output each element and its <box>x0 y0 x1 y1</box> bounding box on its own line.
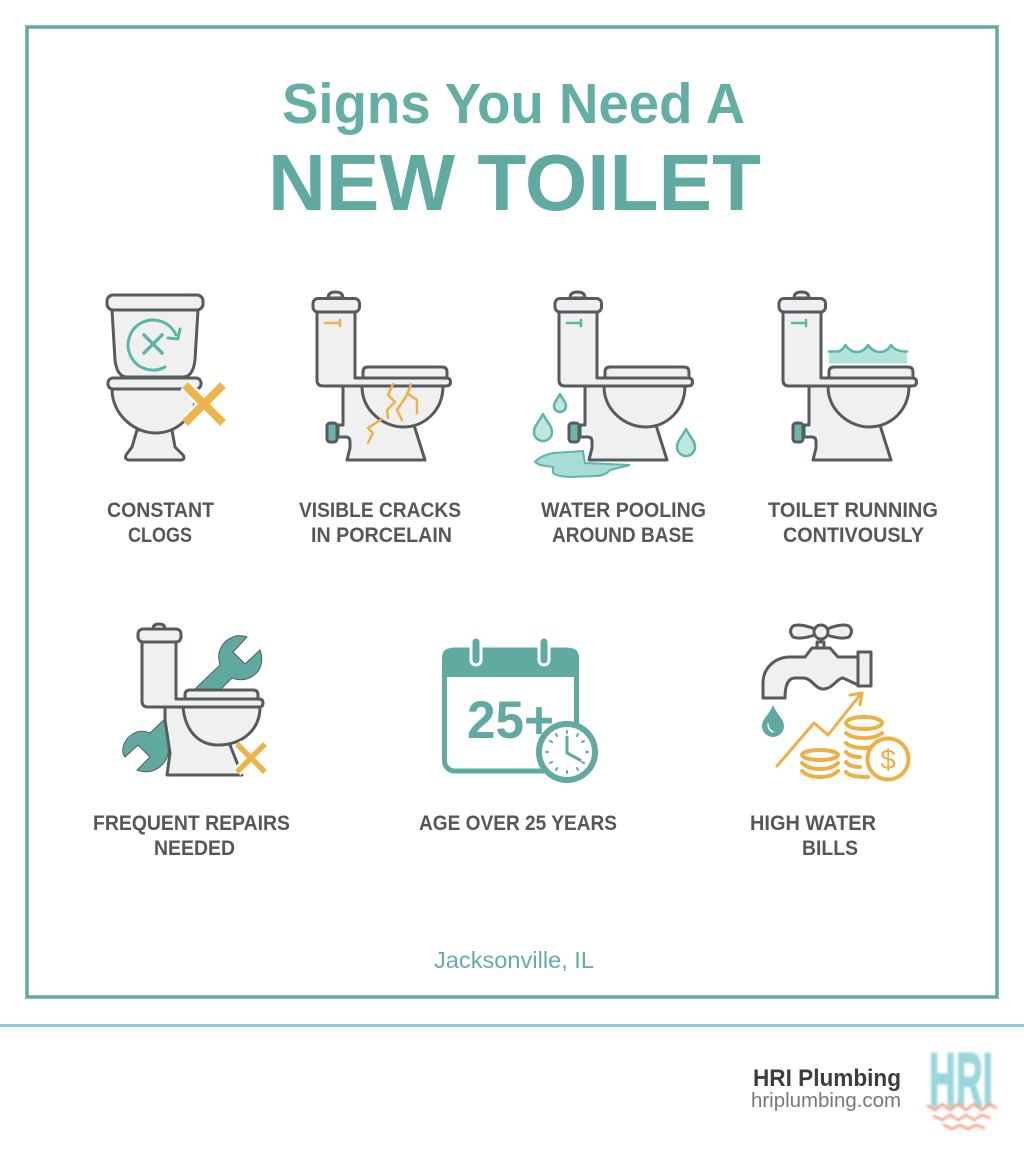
panel: visible cracks <box>299 292 461 547</box>
water puddle <box>535 451 630 477</box>
label: AGE OVER 25 YEARS <box>419 812 617 835</box>
icon: calendar and clock: 25+ <box>467 691 554 750</box>
label <box>541 499 706 547</box>
logo <box>928 1038 996 1129</box>
label <box>750 812 876 860</box>
brand text: HRI Plumbing <box>753 1065 901 1092</box>
toilet <box>138 624 263 775</box>
icon: front toilet with clog symbol <box>107 295 223 460</box>
label: TOILET RUNNING <box>768 499 938 522</box>
label: CONTIVOUSLY <box>783 524 924 547</box>
panel: high water bills <box>750 625 908 860</box>
label: CONSTANT <box>107 499 214 522</box>
icon: calendar and clock <box>442 642 595 780</box>
icon: running toilet with water <box>779 292 916 460</box>
label: IN PORCELAIN <box>311 524 452 547</box>
panel: water pooling <box>534 292 706 547</box>
water waves <box>829 345 907 364</box>
label: HIGH WATER <box>750 812 876 835</box>
panel: age over 25 years <box>419 642 617 835</box>
coins <box>802 717 908 780</box>
icon: faucet, rising arrow and coins: $ <box>880 744 896 775</box>
water drop <box>762 705 784 737</box>
brand text <box>751 1065 901 1112</box>
footer divider <box>0 1024 1024 1027</box>
label: CLOGS <box>128 524 192 547</box>
label: AROUND BASE <box>552 524 694 547</box>
icon: toilet with cracks <box>313 292 450 460</box>
panel: constant clogs <box>107 295 223 547</box>
location text: Jacksonville, IL <box>434 947 594 973</box>
title: Signs You Need A <box>282 72 745 136</box>
icon: faucet, rising arrow and coins <box>762 625 908 780</box>
label: BILLS <box>802 837 858 860</box>
label <box>107 499 214 547</box>
panel: frequent repairs <box>93 624 290 860</box>
label: WATER POOLING <box>541 499 706 522</box>
icon: toilet with wrenches <box>123 624 265 775</box>
title <box>268 72 761 227</box>
title: NEW TOILET <box>268 138 761 227</box>
panel: toilet running <box>768 292 938 547</box>
label <box>93 812 290 860</box>
label: FREQUENT REPAIRS <box>93 812 290 835</box>
rising arrow <box>777 693 862 766</box>
brand text: hriplumbing.com <box>751 1090 901 1112</box>
label: VISIBLE CRACKS <box>299 499 461 522</box>
frame <box>27 27 997 997</box>
icon: leaking toilet <box>534 292 695 477</box>
wrench top <box>196 636 262 698</box>
faucet <box>817 642 824 650</box>
water drops <box>534 394 695 456</box>
label: NEEDED <box>154 837 235 860</box>
label <box>768 499 938 547</box>
label <box>299 499 461 547</box>
wrench bottom <box>123 716 168 772</box>
